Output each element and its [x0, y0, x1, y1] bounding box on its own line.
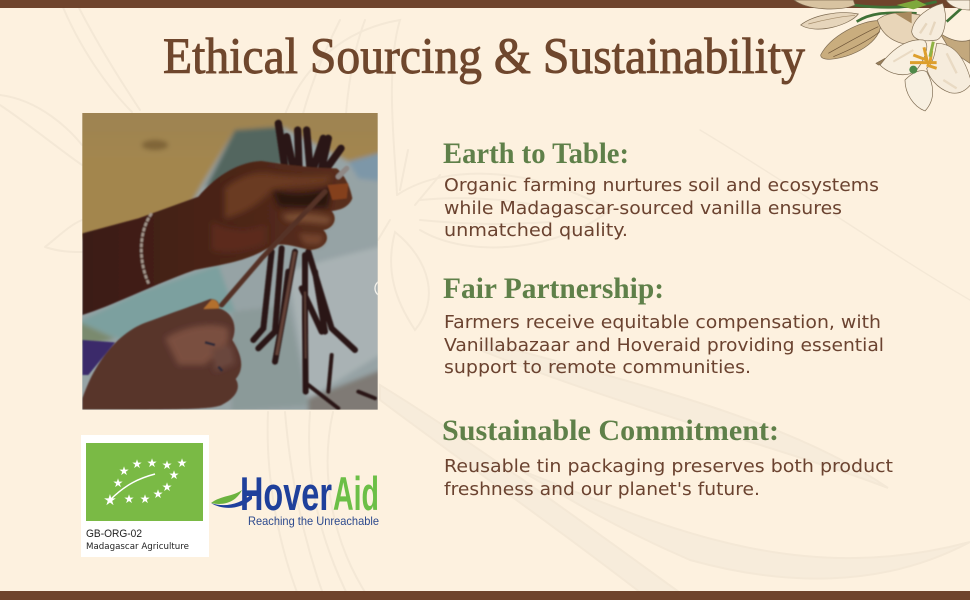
logo tagline: Reaching the Unreachable	[248, 514, 379, 528]
icon: EU organic leaf: ★	[119, 464, 129, 478]
icon: EU organic leaf: ★	[124, 492, 134, 506]
body text: Organic farming nurtures soil and ecosystems	[444, 176, 879, 196]
bud behind	[877, 13, 920, 44]
logo swoosh	[211, 490, 242, 504]
badge code: GB-ORG-02	[86, 528, 142, 540]
body text	[444, 176, 879, 241]
heading: Fair Partnership:	[443, 272, 664, 305]
icon: EU organic leaf: ★	[153, 487, 163, 501]
body text	[444, 457, 893, 500]
heading: Earth to Table:	[443, 137, 629, 170]
icon: EU organic leaf: ★	[113, 476, 123, 490]
body text: freshness and our planet's future.	[444, 480, 760, 500]
lily right petal	[927, 43, 970, 93]
body text: support to remote communities.	[444, 358, 751, 378]
lily lower petal	[905, 71, 933, 111]
body text: Reusable tin packaging preserves both product	[444, 457, 893, 477]
icon: EU organic leaf: ★	[140, 492, 150, 506]
icon: EU organic leaf: ★	[162, 480, 172, 494]
lily top petal	[912, 3, 945, 41]
organic certification badge	[81, 435, 209, 557]
icon: EU organic leaf: ★	[169, 468, 179, 482]
illustration: lily flowers top right	[794, 0, 970, 111]
bottom border bar	[0, 591, 970, 600]
section: Fair Partnership	[443, 272, 884, 378]
heading: Sustainable Commitment:	[442, 414, 779, 447]
bud large	[821, 21, 881, 59]
body text: Vanillabazaar and Hoveraid providing essential	[444, 336, 884, 356]
icon: EU organic leaf	[86, 443, 203, 521]
photo: hands holding vanilla beans	[82, 113, 378, 410]
lily left petal	[880, 40, 927, 75]
stems	[853, 2, 963, 22]
icon: EU organic leaf: ★	[162, 458, 172, 472]
icon: EU organic leaf: ★	[177, 456, 187, 470]
lower hand	[82, 299, 241, 410]
upper arm and hand	[82, 161, 352, 315]
body text: while Madagascar-sourced vanilla ensures	[444, 199, 842, 219]
photo soft background	[82, 113, 378, 410]
background watermark leaf blades	[480, 340, 888, 488]
photo white slider circle fragment	[374, 282, 378, 296]
badge caption: Madagascar Agriculture	[86, 542, 189, 552]
section: Sustainable Commitment	[442, 414, 893, 500]
body text: Farmers receive equitable compensation, with	[444, 313, 881, 333]
body text: unmatched quality.	[444, 221, 628, 241]
icon: EU organic leaf: ★	[147, 456, 157, 470]
logo wordmark Hover: Hover	[240, 467, 332, 520]
icon: EU organic leaf: ★	[132, 457, 142, 471]
upper right flower	[946, 0, 970, 10]
bracelet	[141, 213, 152, 284]
logo wordmark Aid: Aid	[333, 467, 379, 520]
bud left	[801, 13, 858, 29]
bud top	[794, 0, 855, 9]
vanilla beans lower bunch	[253, 248, 375, 408]
photo purple cloth	[82, 340, 115, 375]
section: Earth to Table	[443, 137, 879, 241]
icon: EU organic leaf: ★	[103, 491, 117, 509]
bean held	[222, 192, 325, 305]
hand shadows and highlights	[212, 173, 332, 252]
top border bar	[0, 0, 970, 8]
vanilla beans upper bunch	[278, 123, 341, 168]
pistil	[909, 66, 917, 74]
stamens	[910, 47, 937, 68]
body text	[444, 313, 884, 378]
title: Ethical Sourcing & Sustainability	[163, 29, 805, 85]
HoverAid logo	[211, 467, 379, 528]
